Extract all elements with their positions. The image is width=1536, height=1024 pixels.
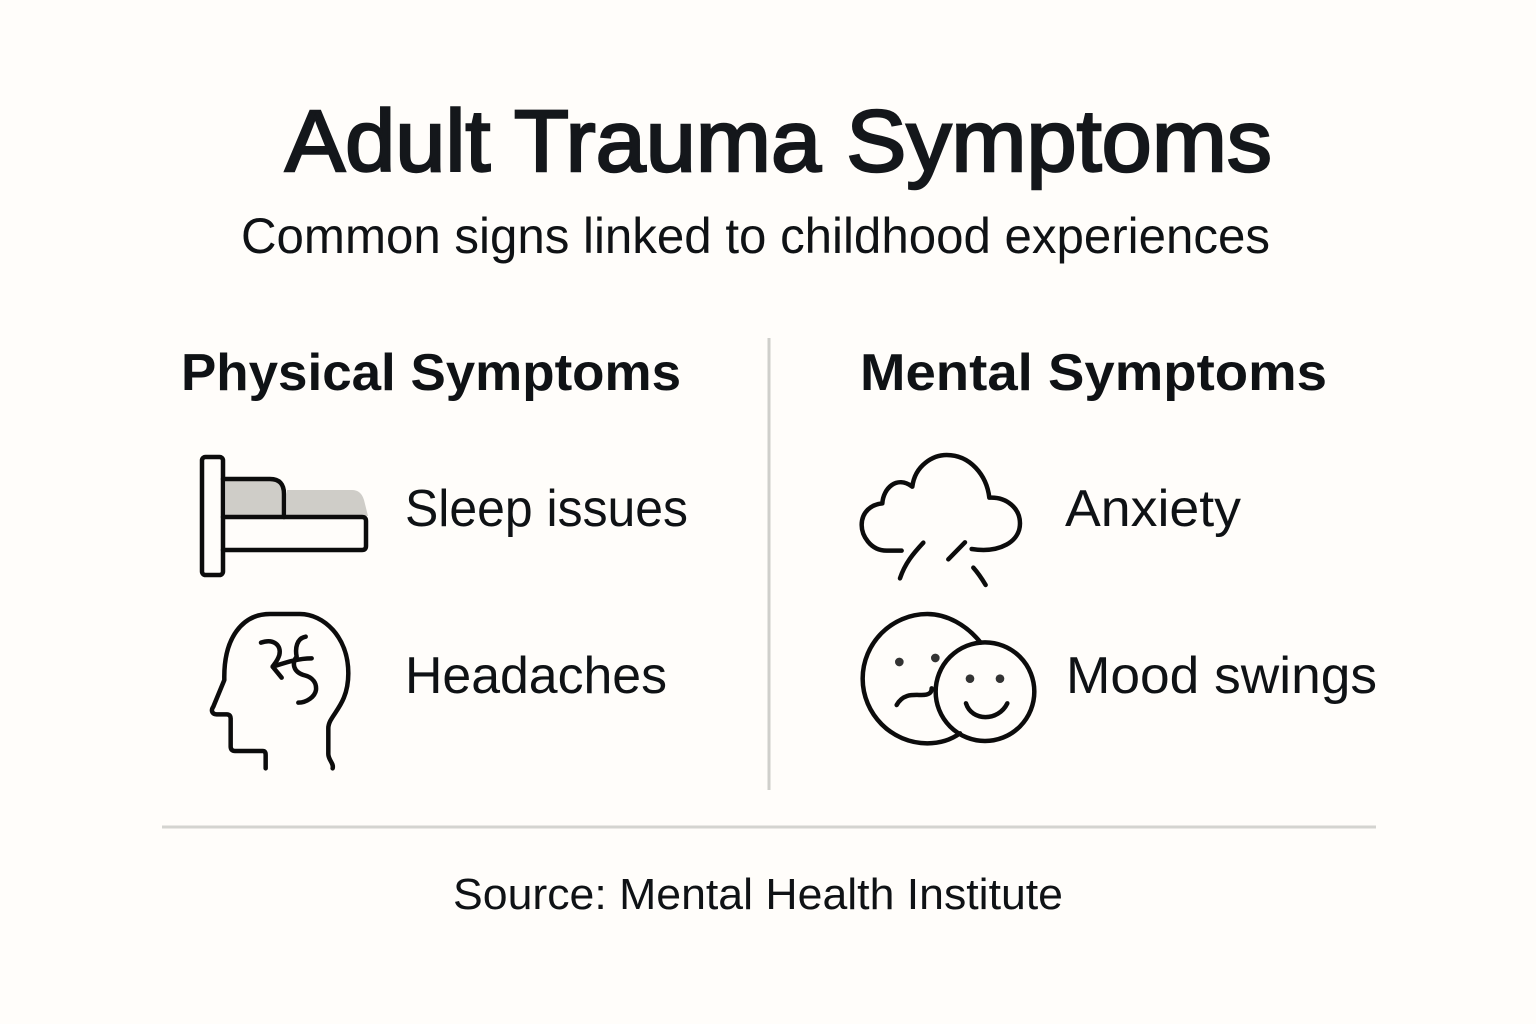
icon: storm cloud	[862, 455, 1020, 585]
source note: Source: Mental Health Institute	[453, 870, 1063, 919]
label: mood swings: Mood swings	[1066, 647, 1377, 705]
icon: sad and happy faces	[863, 614, 1034, 743]
subtitle: Common signs linked to childhood experiences	[241, 208, 1270, 264]
title: Adult Trauma Symptoms	[285, 93, 1272, 190]
panel: physical symptoms	[181, 344, 688, 768]
label: headaches: Headaches	[405, 647, 667, 705]
heading: mental symptoms: Mental Symptoms	[860, 344, 1327, 402]
center divider	[768, 338, 770, 790]
icon: head with squiggles	[212, 614, 348, 768]
label: sleep issues: Sleep issues	[405, 480, 688, 538]
heading: physical symptoms: Physical Symptoms	[181, 344, 681, 402]
footer divider	[162, 826, 1376, 828]
panel: mental symptoms	[860, 344, 1377, 743]
icon: bed	[202, 457, 368, 575]
label: anxiety: Anxiety	[1065, 480, 1241, 538]
